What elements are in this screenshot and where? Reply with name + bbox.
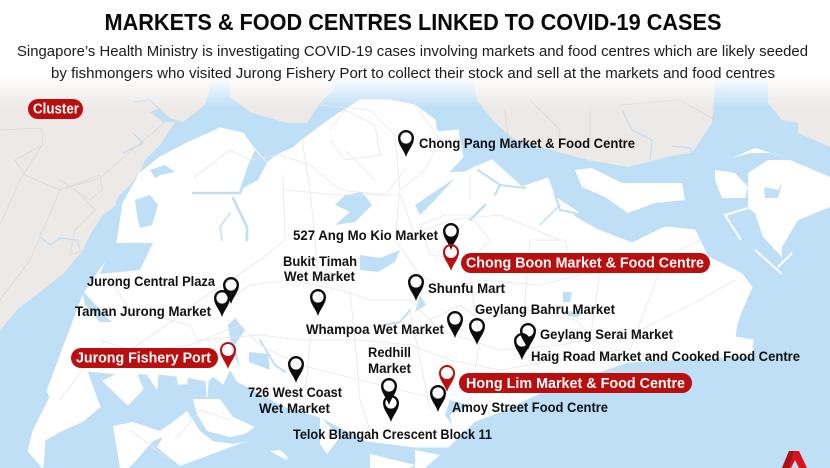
black map pins bbox=[214, 130, 536, 422]
label: Telok Blangah: Telok Blangah Crescent Block 11 bbox=[293, 427, 492, 442]
subtitle: by fishmongers who visited Jurong Fishery Port to collect their stock and sell at the markets and food centres bbox=[51, 65, 775, 82]
map: Malaysia creeks bbox=[40, 100, 692, 250]
pin: Haig Road bbox=[514, 333, 530, 360]
pin: Geylang Serai bbox=[520, 323, 536, 350]
label: Bukit Timah Wet Market: Bukit Timah bbox=[283, 254, 357, 269]
map: Singapore roads bbox=[60, 105, 735, 460]
map: offshore islands bbox=[113, 148, 830, 468]
label: 726 West Coast Wet Market bbox=[248, 385, 342, 416]
label: Haig Road: Haig Road Market and Cooked Food Centre bbox=[531, 349, 800, 364]
legend: cluster pill: Cluster bbox=[33, 102, 79, 118]
label: 726 West Coast Wet Market: 726 West Coast bbox=[248, 385, 342, 400]
pin: Geylang Bahru bbox=[469, 318, 485, 345]
label: Taman Jurong Market: Taman Jurong Market bbox=[75, 304, 211, 319]
pin: Chong Pang bbox=[398, 130, 414, 157]
red cluster labels bbox=[71, 253, 710, 393]
label: Bukit Timah Wet Market: Wet Market bbox=[284, 269, 355, 284]
pin: Whampoa bbox=[447, 311, 463, 338]
subtitle: Singapore’s Health Ministry is investigating COVID-19 cases involving markets and food centres which are likely seeded bbox=[17, 43, 808, 60]
label: 527 Ang Mo Kio: 527 Ang Mo Kio Market bbox=[293, 228, 438, 243]
pin: Shunfu Mart bbox=[408, 274, 424, 301]
label: Redhill Market bbox=[368, 345, 411, 376]
logo: red A mark bbox=[782, 451, 807, 468]
pin: 527 Ang Mo Kio bbox=[443, 223, 459, 250]
label: Hong Lim Market & Food Centre: Hong Lim Market & Food Centre bbox=[466, 376, 685, 392]
pin: Bukit Timah bbox=[310, 289, 326, 316]
pin: Jurong Fishery Port bbox=[220, 342, 236, 369]
label: Shunfu Mart: Shunfu Mart bbox=[428, 281, 505, 296]
title: MARKETS & FOOD CENTRES LINKED TO COVID-19 CASES bbox=[104, 9, 722, 35]
pin: Redhill bbox=[381, 378, 397, 405]
top fade to white bbox=[0, 0, 830, 108]
label: Geylang Bahru Market: Geylang Bahru Market bbox=[475, 302, 615, 317]
map: Changi thin land strips bbox=[725, 208, 792, 274]
map: Malaysia roads bbox=[0, 100, 715, 300]
pin: Taman Jurong bbox=[214, 290, 230, 317]
pin: Telok Blangah bbox=[383, 395, 399, 422]
map: river strokes bbox=[193, 170, 575, 372]
label: Amoy Street: Amoy Street Food Centre bbox=[452, 400, 608, 415]
map: reservoirs bbox=[82, 150, 782, 425]
label: Jurong Fishery Port: Jurong Fishery Port bbox=[76, 350, 211, 366]
label: Redhill Market: Market bbox=[368, 361, 411, 376]
label: Chong Pang: Chong Pang Market & Food Centre bbox=[419, 136, 635, 151]
red map pins bbox=[220, 244, 459, 392]
map: Malaysia land bbox=[0, 60, 830, 330]
label: Geylang Serai Market: Geylang Serai Market bbox=[540, 327, 673, 342]
label: Bukit Timah Wet Market bbox=[283, 254, 357, 284]
pin: West Coast bbox=[288, 356, 304, 383]
pin: Jurong Central Plaza bbox=[223, 277, 239, 304]
pin: Chong Boon bbox=[443, 244, 459, 271]
label: 726 West Coast Wet Market: Wet Market bbox=[259, 401, 330, 416]
pin: Hong Lim bbox=[439, 365, 455, 392]
pin: Amoy Street bbox=[430, 385, 446, 412]
label: Jurong Central Plaza: Jurong Central Plaza bbox=[87, 274, 215, 289]
label: Whampoa Wet Market: Whampoa Wet Market bbox=[306, 322, 444, 337]
label: Redhill Market: Redhill bbox=[368, 345, 411, 360]
black location labels bbox=[75, 136, 800, 442]
subtitle bbox=[17, 43, 808, 82]
label: Chong Boon Market & Food Centre: Chong Boon Market & Food Centre bbox=[466, 256, 704, 272]
map: Singapore main island bbox=[28, 100, 753, 468]
